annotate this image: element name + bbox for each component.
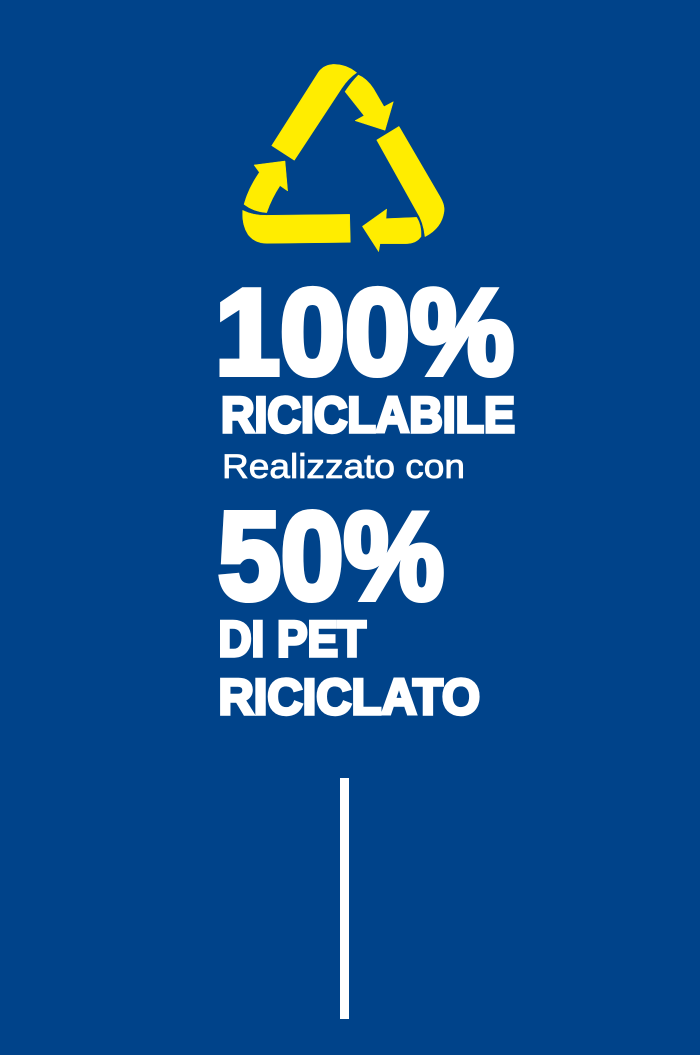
heading: 50%: 50% xyxy=(218,488,444,626)
icon part: bottom band xyxy=(243,210,350,243)
icon part: top-right arrow xyxy=(345,75,393,130)
icon: recycling triangle xyxy=(243,64,444,252)
heading: RICICLATO: RICICLATO xyxy=(218,669,480,725)
icon part: top-left band xyxy=(272,64,357,160)
vertical white line xyxy=(340,778,349,1019)
heading: RICICLABILE: RICICLABILE xyxy=(221,387,515,443)
icon part: left arrow xyxy=(244,161,288,213)
heading: 100%: 100% xyxy=(215,264,514,400)
icon part: right band xyxy=(377,126,444,237)
text: Realizzato con: Realizzato con xyxy=(222,448,465,486)
icon part: bottom-right arrow xyxy=(362,209,421,252)
heading: DI PET: DI PET xyxy=(218,611,366,667)
